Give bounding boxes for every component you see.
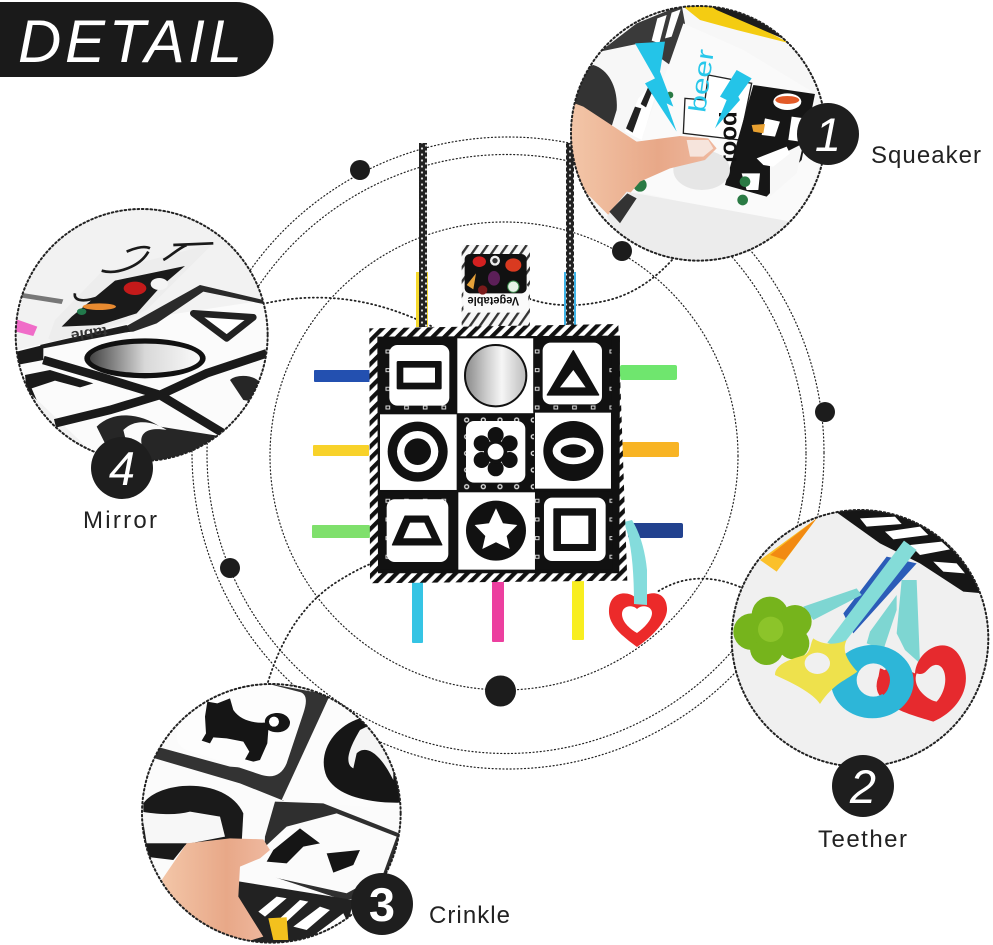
cell: circle bbox=[380, 414, 457, 490]
fabric: lower page bbox=[17, 300, 270, 463]
tab: vegetable card: Vegetable bbox=[467, 294, 519, 308]
strap bbox=[20, 293, 63, 304]
badge 3 with label Crinkle: 3 bbox=[369, 878, 395, 931]
badge 3 with label Crinkle: Crinkle bbox=[429, 902, 510, 929]
badge 1 with label Squeaker: Squeaker bbox=[871, 142, 981, 169]
fabric: dark corner with stripes bbox=[600, 5, 685, 65]
tab: vegetable card bbox=[462, 245, 530, 328]
orbit lines: dotted circles and connectors bbox=[192, 137, 824, 769]
shape: upper right triangle bbox=[193, 313, 253, 338]
cell: triangle bbox=[533, 338, 612, 412]
teether: red heart bbox=[877, 645, 966, 722]
fabric: food column bbox=[725, 85, 815, 197]
panel: top right bbox=[282, 698, 345, 800]
photo circle 1: squeaker bbox=[570, 0, 837, 267]
shape grid bbox=[380, 338, 612, 570]
badge 1 with label Squeaker bbox=[797, 103, 981, 169]
badge 2 with label Teether: Teether bbox=[818, 826, 907, 853]
cell: trapezoid bbox=[380, 492, 457, 570]
cell: flower bbox=[457, 413, 534, 491]
striped ladder edge bbox=[113, 285, 263, 333]
photo circle 4: mirror: table bbox=[70, 324, 108, 344]
raised flap bbox=[54, 340, 56, 342]
squeaker disc bbox=[673, 150, 730, 190]
badge 4 with label Mirror: 4 bbox=[109, 442, 135, 495]
striped binding bbox=[833, 508, 983, 593]
yellow tab bbox=[268, 917, 288, 940]
panel: hippo bbox=[130, 758, 270, 867]
title badge: DETAIL: DETAIL bbox=[18, 8, 242, 75]
teether ribbon bbox=[624, 520, 647, 605]
cell: star bbox=[458, 492, 535, 570]
hand bbox=[570, 102, 717, 217]
cell: mirror bbox=[457, 338, 533, 413]
striped border bbox=[369, 324, 627, 583]
fabric: dark half circle and stripes bbox=[574, 65, 617, 126]
pink ribbon tab bbox=[16, 319, 37, 336]
cell: square bbox=[535, 492, 612, 570]
hand bbox=[162, 838, 270, 945]
fabric: black bands bbox=[43, 353, 267, 433]
fabric: bottom stripes bbox=[238, 882, 352, 943]
yellow and orange tab bbox=[760, 518, 817, 572]
central product: black and white cloth book bbox=[312, 143, 683, 647]
text on page: food bbox=[716, 111, 743, 163]
cell: rectangle bbox=[380, 338, 457, 413]
shape: left rectangle bbox=[25, 370, 93, 400]
colored ribbon tabs bbox=[312, 365, 683, 643]
ribbons bbox=[803, 541, 920, 663]
photo circle 1: squeaker: beer bbox=[684, 48, 720, 114]
cell: oval bbox=[535, 413, 611, 489]
fabric: dark seams bbox=[143, 682, 330, 801]
teether: yellow star bbox=[775, 638, 857, 704]
photo circle 3: crinkle bbox=[141, 683, 402, 944]
orbit dots bbox=[220, 160, 835, 706]
icon: cyan lightning bolts bbox=[635, 42, 677, 132]
photo circle 4: mirror bbox=[14, 208, 269, 462]
panel: horse bbox=[263, 802, 403, 900]
teether: blue ring bbox=[831, 645, 914, 718]
badge 4 with label Mirror: Mirror bbox=[83, 507, 157, 534]
fabric: page with grid bbox=[669, 23, 685, 65]
badge 4 with label Mirror bbox=[83, 437, 157, 534]
badge 1 with label Squeaker: 1 bbox=[815, 108, 841, 161]
teether: green flower bbox=[733, 597, 812, 665]
photo circle 2: teether bbox=[730, 509, 990, 766]
shape: bottom blobs bbox=[96, 415, 216, 460]
base shadow bbox=[607, 192, 790, 260]
mirror opening bbox=[84, 338, 206, 378]
badge 3 with label Crinkle bbox=[351, 873, 510, 935]
badge 2 with label Teether bbox=[818, 755, 907, 853]
panel: dog bbox=[202, 684, 306, 776]
badge 2 with label Teether: 2 bbox=[849, 760, 876, 813]
hanging straps bbox=[416, 143, 576, 327]
icon: red heart teether bbox=[609, 593, 667, 647]
